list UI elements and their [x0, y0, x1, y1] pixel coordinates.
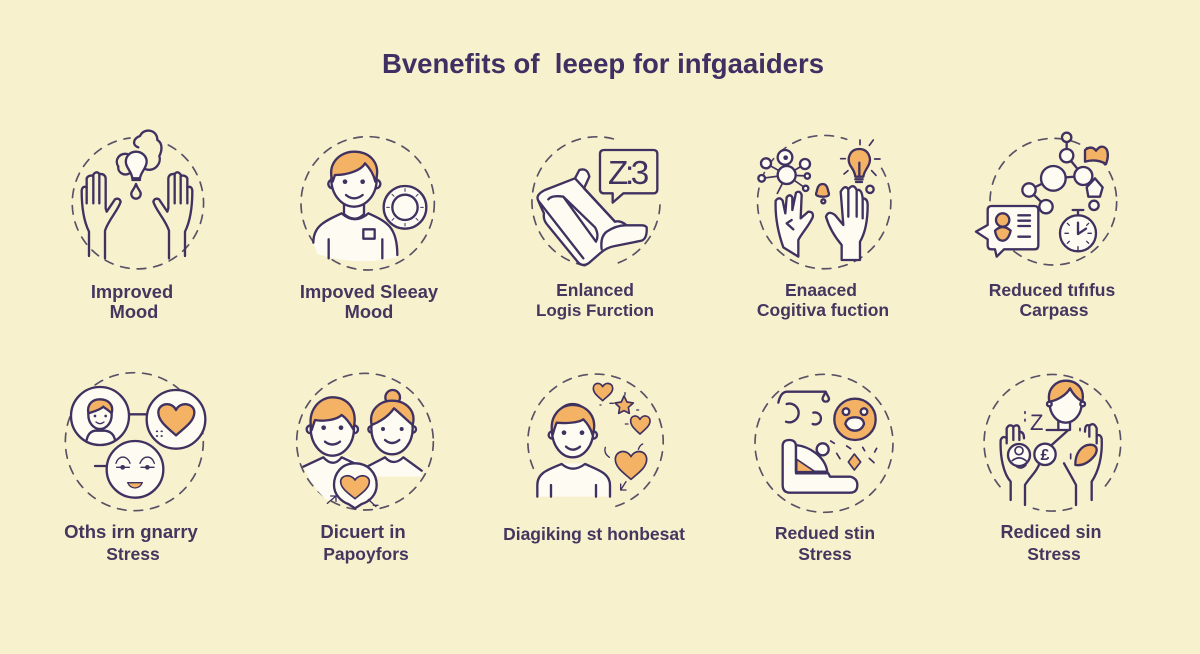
panel: improved mood [72, 131, 204, 322]
icon: smiling person with dial badge [301, 137, 434, 270]
label: Logis Furction [536, 301, 654, 320]
icon: couple with heart pin [297, 373, 433, 510]
label: Diagiking st honbesat [503, 524, 685, 544]
label: Cogitiva fuction [757, 300, 889, 320]
label: Rediced sin [1000, 522, 1102, 542]
label: Carpass [1019, 300, 1089, 320]
label: Enaaced [785, 280, 857, 300]
panel: enhanced logic function [532, 137, 660, 320]
panel: improved sleepy mood [300, 137, 439, 322]
icon: baby bouncer and orange face [755, 374, 893, 512]
icon: raised hands with lightbulb and cloud [72, 131, 204, 269]
label: Reduced tıfıfus [989, 280, 1115, 300]
icon: hands with coins and head: £ [1041, 447, 1050, 464]
label: Mood [345, 301, 393, 322]
label: Dicuert in [320, 521, 406, 542]
icon: hands with coins and head: Z [1030, 410, 1043, 435]
panel: others in gnarry stress [64, 373, 205, 564]
panel: rediced sin stress [984, 374, 1121, 564]
icon: person, heart and face circles [65, 373, 205, 511]
panel: enhanced cognitive function [757, 135, 891, 320]
title: Bvenefits of leeep for infgaaiders [382, 48, 824, 79]
label: Papoyfors [323, 544, 409, 564]
label: Stress [106, 544, 160, 564]
panel: reduced stress [976, 133, 1117, 320]
icon: card, stopwatch and molecule [976, 133, 1117, 265]
icon: hands with coins and head [984, 374, 1121, 511]
icon: person with hearts and star [528, 374, 663, 507]
icon: hands with network and lightbulb [758, 135, 891, 269]
panel: redued stin stress [755, 374, 893, 564]
icon: recliner with Z3 speech bubble [532, 137, 660, 266]
label: Improved [91, 281, 173, 302]
panel: dicuert in papoyfors [297, 373, 433, 564]
label: Redued stin [775, 523, 875, 543]
label: Mood [110, 301, 158, 322]
label: Stress [798, 544, 852, 564]
panel: diagiking st honbesat [503, 374, 685, 544]
label: Impoved Sleeay [300, 281, 439, 302]
label: Enlanced [556, 280, 634, 300]
icon: recliner with Z3 speech bubble: Z:3 [608, 155, 649, 192]
label: Stress [1027, 544, 1081, 564]
label: Oths irn gnarry [64, 521, 199, 542]
